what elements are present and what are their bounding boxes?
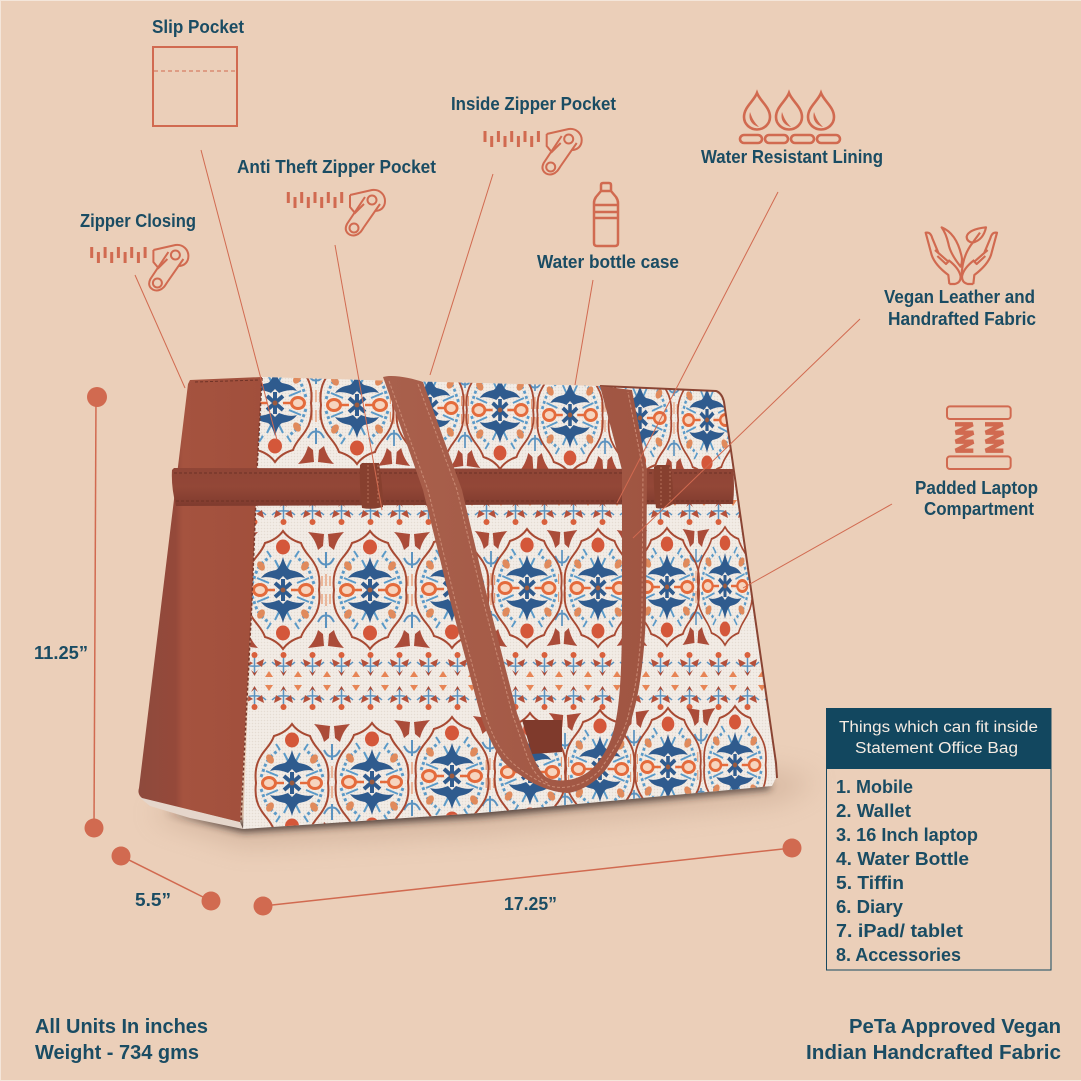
icon: padded springs xyxy=(947,406,1011,469)
bag product illustration xyxy=(138,344,820,845)
icon: water bottle xyxy=(594,183,618,246)
dimension: height xyxy=(34,387,107,838)
list of items: 3. 16 Inch laptop xyxy=(836,825,978,845)
dimension: depth xyxy=(112,846,220,910)
leather tag xyxy=(522,720,562,754)
footer right: certification xyxy=(806,1015,1061,1064)
footer right: certification: Indian Handcrafted Fabric xyxy=(806,1041,1061,1064)
list of items: 8. Accessories xyxy=(836,945,961,965)
label: anti theft zipper pocket: Anti Theft Zipper Pocket xyxy=(237,157,436,177)
list of items: 4. Water Bottle xyxy=(836,849,969,869)
panel header: Statement Office Bag xyxy=(855,740,1018,757)
icon: hands and plant xyxy=(926,227,997,284)
icon: zipper anti theft xyxy=(288,190,385,235)
list of items: 1. Mobile xyxy=(836,777,913,797)
right edge piping xyxy=(600,386,777,778)
label: zipper closing: Zipper Closing xyxy=(80,211,196,231)
list of items: 5. Tiffin xyxy=(836,873,904,893)
label: padded laptop compartment xyxy=(915,478,1038,519)
footer left: units and weight: All Units In inches xyxy=(35,1015,208,1038)
label: vegan leather and handcrafted fabric: Handrafted Fabric xyxy=(888,309,1036,329)
bottom fabric sliver xyxy=(139,797,243,829)
icon: slip pocket xyxy=(153,47,237,126)
icon: water drops xyxy=(740,93,840,143)
label: vegan leather and handcrafted fabric: Vegan Leather and xyxy=(884,287,1035,307)
panel header: Things which can fit inside xyxy=(839,719,1038,736)
callout lines xyxy=(135,150,892,588)
label: vegan leather and handcrafted fabric xyxy=(884,287,1036,329)
panel header xyxy=(826,708,1051,769)
depth value: 5.5” xyxy=(135,890,171,910)
list of items xyxy=(836,777,978,965)
belt loops xyxy=(360,463,673,509)
label: padded laptop compartment: Padded Laptop xyxy=(915,478,1038,498)
list of items: 6. Diary xyxy=(836,897,903,917)
fabric front panel xyxy=(243,377,776,829)
panel: things which can fit inside xyxy=(826,708,1051,970)
footer left: units and weight: Weight - 734 gms xyxy=(35,1041,199,1064)
list of items: 7. iPad/ tablet xyxy=(836,921,963,941)
label: water resistant lining: Water Resistant Lining xyxy=(701,147,883,167)
strap xyxy=(383,376,647,793)
label: padded laptop compartment: Compartment xyxy=(924,499,1034,519)
left leather side panel xyxy=(138,377,262,822)
width value: 17.25” xyxy=(504,894,557,914)
icon: zipper closing xyxy=(92,245,188,290)
dimension: width xyxy=(254,838,802,916)
floor shadow xyxy=(150,770,820,845)
footer right: certification: PeTa Approved Vegan xyxy=(849,1015,1061,1038)
label: slip pocket: Slip Pocket xyxy=(152,17,244,37)
label: inside zipper pocket: Inside Zipper Pocket xyxy=(451,94,616,114)
icon: zipper inside xyxy=(485,129,582,174)
footer left: units and weight xyxy=(35,1015,208,1064)
belt xyxy=(172,468,734,506)
list of items: 2. Wallet xyxy=(836,801,911,821)
label: water bottle case: Water bottle case xyxy=(537,252,679,272)
height value: 11.25” xyxy=(34,643,88,663)
